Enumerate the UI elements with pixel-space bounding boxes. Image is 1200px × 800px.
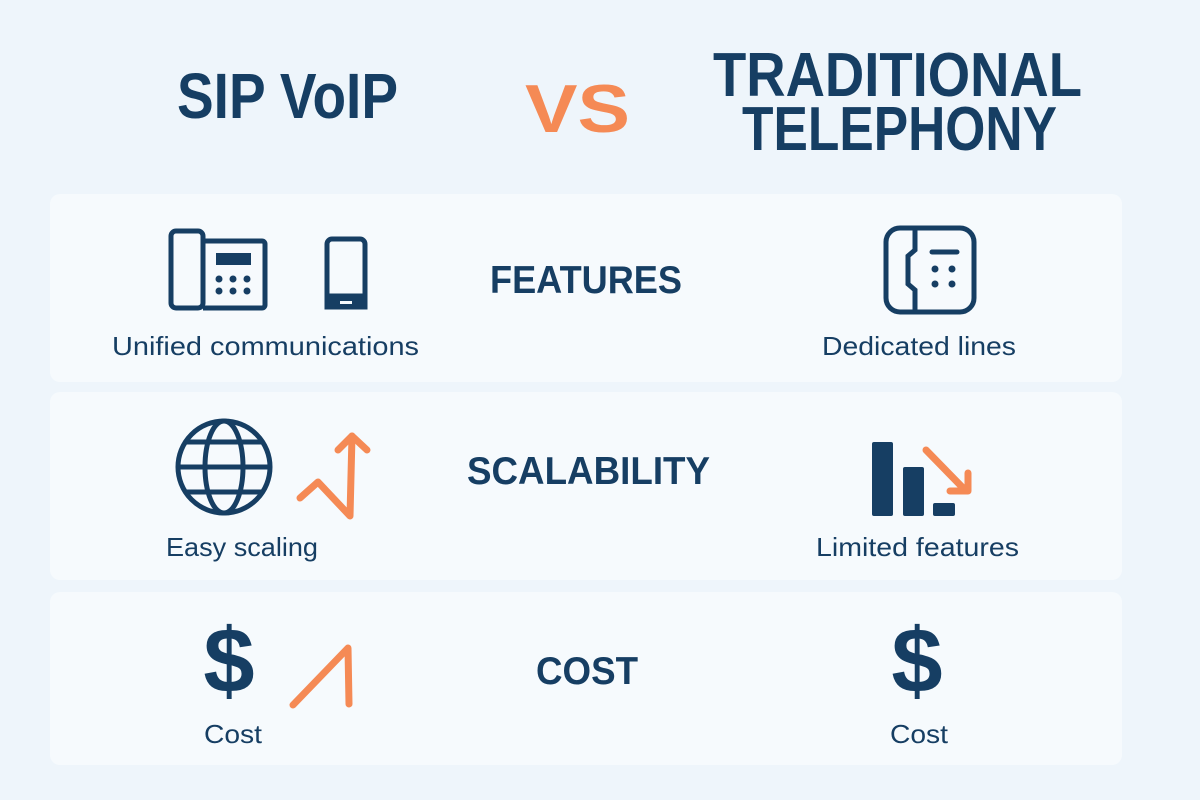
heading: cost: COST <box>536 650 638 693</box>
heading: features: FEATURES <box>490 259 682 302</box>
icon: globe <box>178 421 270 513</box>
title: VS: VS <box>525 71 630 147</box>
icon: smartphone <box>327 239 365 307</box>
panel: features <box>50 194 1122 382</box>
text: easy scaling: Easy scaling <box>166 532 318 562</box>
title: Traditional Telephony <box>713 41 1082 164</box>
text: dedicated lines: Dedicated lines <box>822 331 1016 361</box>
heading: scalability: SCALABILITY <box>467 450 710 493</box>
arrow: rising line <box>293 648 349 705</box>
panel: cost <box>50 592 1122 765</box>
text: unified communications: Unified communications <box>112 331 419 361</box>
arrow: up <box>300 436 367 516</box>
text: limited features: Limited features <box>816 532 1019 562</box>
text: cost left: Cost <box>204 719 263 749</box>
panel: scalability <box>50 392 1122 580</box>
title: Traditional Telephony: TELEPHONY <box>742 95 1057 164</box>
text: cost right: Cost <box>890 719 949 749</box>
title: SIP VoIP: SIP VoIP <box>177 60 398 132</box>
title: Traditional Telephony: TRADITIONAL <box>713 41 1082 110</box>
icon: landline <box>886 228 974 312</box>
icon: declining bars <box>872 442 968 516</box>
icon: desk phone <box>171 231 265 308</box>
icon: dollar left: $ <box>203 610 255 712</box>
icon: dollar right: $ <box>891 610 943 712</box>
